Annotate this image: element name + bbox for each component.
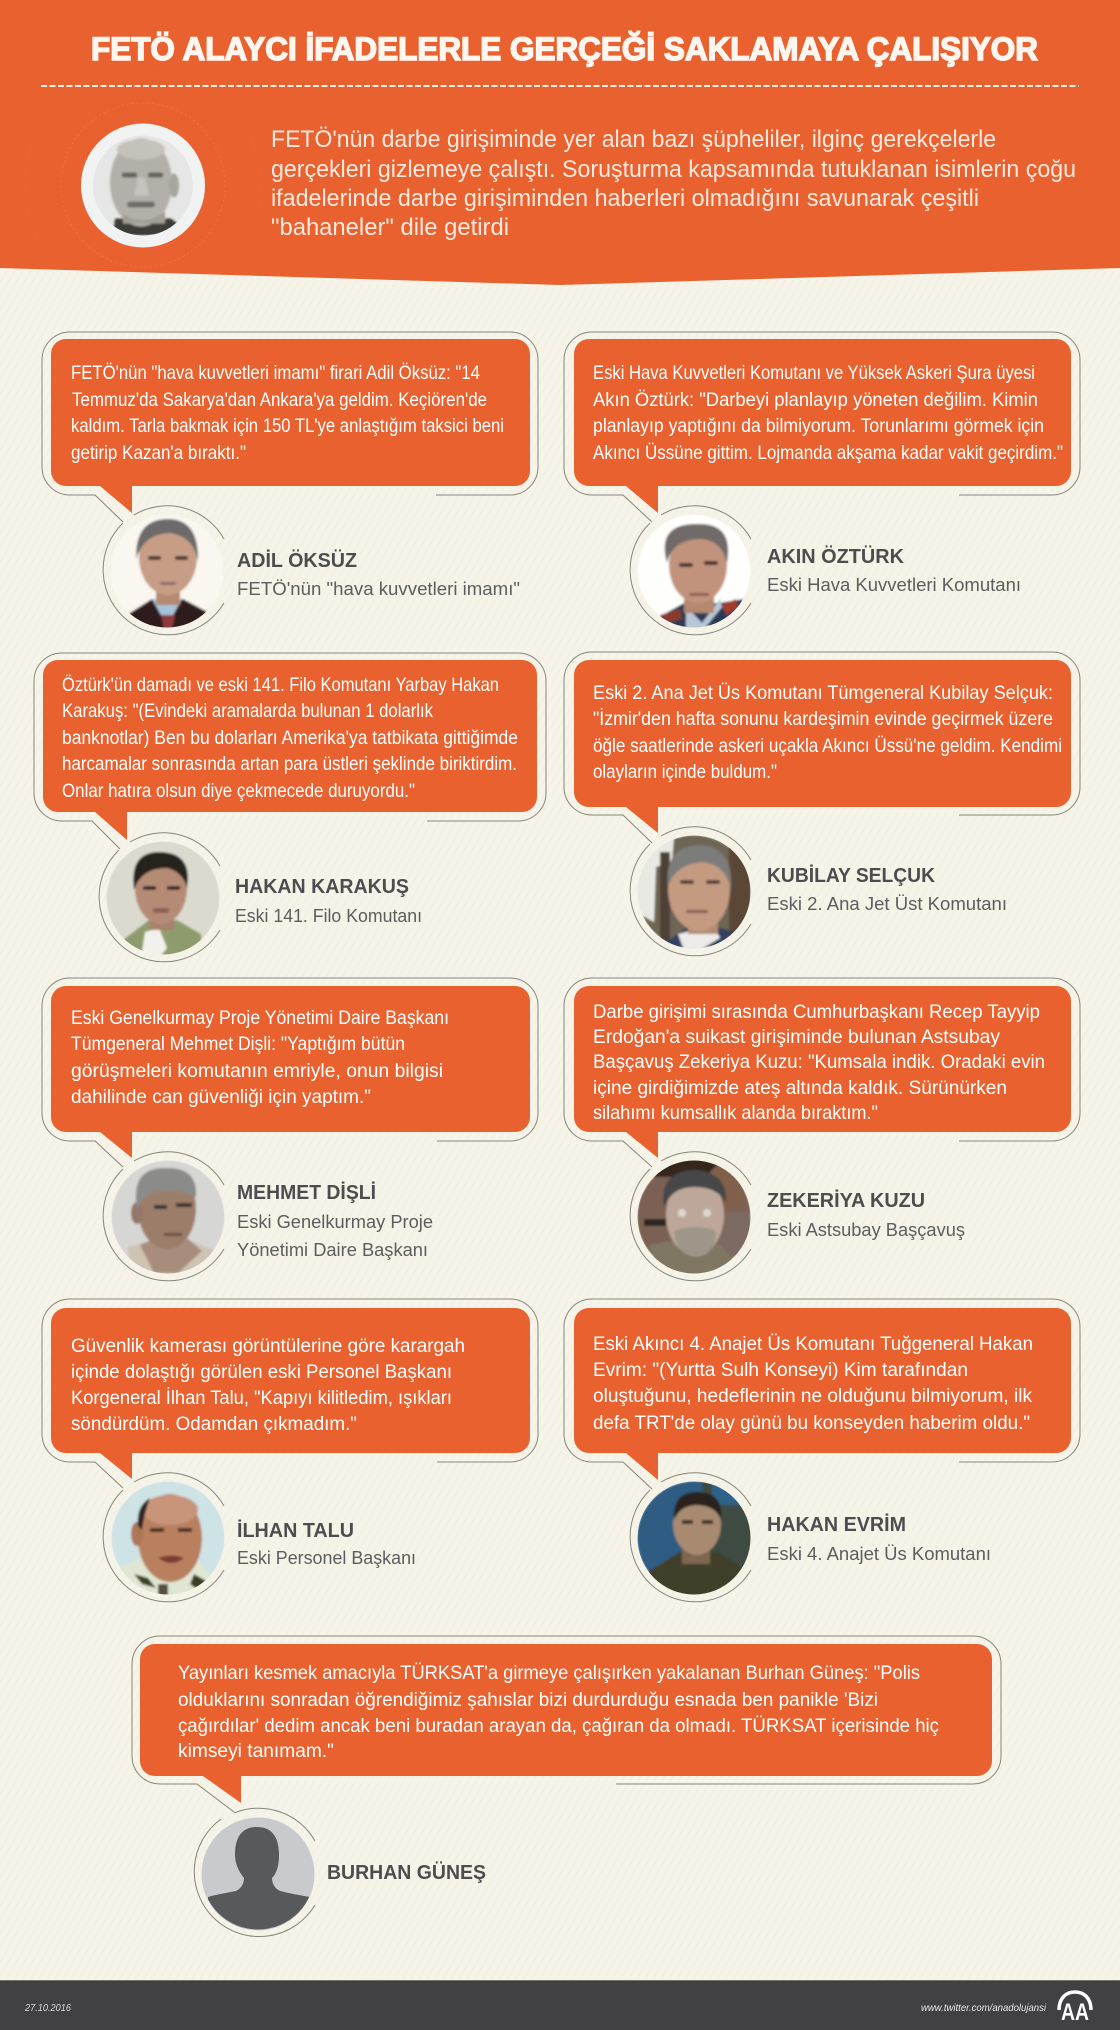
title: FETÖ ALAYCI İFADELERLE GERÇEĞİ SAKLAMAYA ÇALIŞIYOR xyxy=(91,31,1038,67)
label: Zekeriya Kuzu: Eski Astsubay Başçavuş xyxy=(767,1219,965,1240)
panel: Akın Öztürk quote: Akıncı Üssüne gittim. Lojmanda akşama kadar vakit geçirdim." xyxy=(593,442,1063,464)
panel: Zekeriya Kuzu quote: Başçavuş Zekeriya Kuzu: "Kumsala indik. Oradaki evin xyxy=(593,1051,1045,1073)
panel: Kubilay Selçuk quote: öğle saatlerinde askeri uçakla Akıncı Üssü'ne geldim. Kendimi xyxy=(593,735,1062,757)
panel: Zekeriya Kuzu quote: Darbe girişimi sırasında Cumhurbaşkanı Recep Tayyip xyxy=(593,1001,1040,1023)
footer link: www.twitter.com/anadolujansi xyxy=(921,2002,1047,2014)
panel: Zekeriya Kuzu quote: içine girdiğimizde ateş altında kaldık. Sürünürken xyxy=(593,1077,1007,1099)
label: Hakan Evrim xyxy=(767,1513,991,1564)
label: Kubilay Selçuk: Eski 2. Ana Jet Üst Komutanı xyxy=(767,893,1007,914)
panel: İlhan Talu quote: Korgeneral İlhan Talu, "Kapıyı kilitledim, ışıkları xyxy=(71,1386,452,1409)
label: Adil Öksüz: FETÖ'nün "hava kuvvetleri imamı" xyxy=(237,578,520,599)
panel: İlhan Talu quote: içinde dolaştığı görülen eski Personel Başkanı xyxy=(71,1361,452,1383)
panel: Mehmet Dişli quote xyxy=(42,978,538,1167)
panel: Adil Öksüz quote: Temmuz'da Sakarya'dan Ankara'ya geldim. Keçiören'de xyxy=(72,389,487,411)
intro text: ifadelerinde darbe girişiminden haberleri olmadığını savunarak çeşitli xyxy=(271,185,979,212)
label: Zekeriya Kuzu xyxy=(767,1189,965,1240)
label: Hakan Karakuş xyxy=(235,876,422,926)
panel: Burhan Güneş quote: kimseyi tanımam." xyxy=(178,1740,334,1762)
label: Kubilay Selçuk: KUBİLAY SELÇUK xyxy=(767,864,936,887)
panel: Kubilay Selçuk quote: olayların içinde buldum." xyxy=(593,761,777,783)
panel: Mehmet Dişli quote: Tümgeneral Mehmet Dişli: "Yaptığım bütün xyxy=(71,1033,405,1055)
label: Mehmet Dişli xyxy=(237,1181,433,1260)
label: Hakan Karakuş: HAKAN KARAKUŞ xyxy=(235,876,409,898)
panel: Adil Öksüz quote: kaldım. Tarla bakmak için 150 TL'ye anlaştığım taksici beni xyxy=(71,415,504,437)
footer bar xyxy=(0,1980,1120,2030)
label: İlhan Talu xyxy=(237,1519,416,1568)
panel: Burhan Güneş quote: Yayınları kesmek amacıyla TÜRKSAT'a girmeye çalışırken yakalanan Burhan Güneş: "Polis xyxy=(178,1662,920,1684)
label: İlhan Talu: İLHAN TALU xyxy=(237,1519,354,1542)
panel: Hakan Evrim quote: Eski Akıncı 4. Anajet Üs Komutanı Tuğgeneral Hakan xyxy=(593,1333,1033,1355)
label: Zekeriya Kuzu: ZEKERİYA KUZU xyxy=(767,1189,925,1212)
panel: Hakan Karakuş quote: banknotlar) Ben bu dolarları Amerika'ya tatbikata gittiğimde xyxy=(62,727,518,749)
label: Kubilay Selçuk xyxy=(767,864,1007,914)
header band xyxy=(0,0,1120,303)
panel: İlhan Talu quote: Güvenlik kamerası görüntülerine göre karargah xyxy=(71,1335,465,1357)
portrait: Mehmet Dişli xyxy=(103,1152,225,1281)
panel: Hakan Karakuş quote: Öztürk'ün damadı ve eski 141. Filo Komutanı Yarbay Hakan xyxy=(62,674,499,696)
label: Adil Öksüz: ADİL ÖKSÜZ xyxy=(237,549,357,572)
intro text: FETÖ'nün darbe girişiminde yer alan bazı şüpheliler, ilginç gerekçelerle xyxy=(271,126,996,153)
icon: Anadolu Agency logo: AA xyxy=(1061,1999,1089,2026)
panel: Akın Öztürk quote: Akın Öztürk: "Darbeyi planlayıp yöneten değilim. Kimin xyxy=(593,389,1038,411)
label: Adil Öksüz xyxy=(237,549,520,599)
panel: Hakan Evrim quote: Evrim: "(Yurtta Sulh Konseyi) Kim tarafından xyxy=(593,1359,968,1381)
panel: Zekeriya Kuzu quote: silahımı kumsallık alanda bıraktım." xyxy=(593,1102,878,1124)
panel: Burhan Güneş quote: çağırdılar' dedim ancak beni buradan arayan da, çağıran da olmadı. TÜRKSAT içerisinde hiç xyxy=(178,1715,939,1737)
panel: Hakan Evrim quote xyxy=(564,1299,1080,1489)
label: Hakan Evrim: Eski 4. Anajet Üs Komutanı xyxy=(767,1543,991,1564)
panel: Burhan Güneş quote: olduklarını sonradan öğrendiğimiz şahıslar bizi durdurduğu esnada ben panikle 'Bizi xyxy=(178,1689,878,1711)
intro text: "bahaneler" dile getirdi xyxy=(271,214,509,241)
panel: Kubilay Selçuk quote xyxy=(564,652,1080,843)
panel: İlhan Talu quote xyxy=(42,1299,538,1488)
panel: Hakan Evrim quote: defa TRT'de olay günü bu konseyden haberim oldu." xyxy=(593,1412,1030,1434)
panel: Hakan Karakuş quote: Karakuş: "(Evindeki aramalarda bulunan 1 dolarlık xyxy=(62,700,433,722)
portrait: Kubilay Selçuk xyxy=(630,827,751,956)
portrait: İlhan Talu xyxy=(103,1473,225,1602)
panel: Hakan Karakuş quote: harcamalar sonrasında artan para üstleri şeklinde biriktirdim. xyxy=(62,753,517,775)
intro text xyxy=(271,126,1076,241)
label: Akın Öztürk: AKIN ÖZTÜRK xyxy=(767,545,905,568)
portrait: Adil Öksüz xyxy=(103,506,224,635)
panel: Kubilay Selçuk quote: Eski 2. Ana Jet Üs Komutanı Tümgeneral Kubilay Selçuk: xyxy=(593,682,1053,704)
panel: Akın Öztürk quote: planlayıp yaptığını da bilmiyorum. Torunlarımı görmek için xyxy=(593,415,1044,437)
label: İlhan Talu: Eski Personel Başkanı xyxy=(237,1547,416,1568)
portrait: Zekeriya Kuzu xyxy=(630,1152,751,1281)
panel: Hakan Karakuş quote: Onlar hatıra olsun diye çekmecede duruyordu." xyxy=(62,780,415,802)
icon: Anadolu Agency logo xyxy=(1059,1992,1091,2026)
icon: header portrait xyxy=(81,124,205,248)
panel: Mehmet Dişli quote: görüşmeleri komutanın emriyle, onun bilgisi xyxy=(71,1060,443,1082)
panel: Mehmet Dişli quote: Eski Genelkurmay Proje Yönetimi Daire Başkanı xyxy=(71,1007,449,1029)
panel: Hakan Karakuş quote xyxy=(34,653,546,849)
label: Mehmet Dişli: MEHMET DİŞLİ xyxy=(237,1181,376,1204)
panel: Adil Öksüz quote: getirip Kazan'a bıraktı." xyxy=(71,442,246,464)
label: Hakan Karakuş: Eski 141. Filo Komutanı xyxy=(235,905,422,926)
portrait: Hakan Evrim xyxy=(630,1473,752,1602)
portrait: Hakan Karakuş xyxy=(99,833,220,962)
panel: İlhan Talu quote: söndürdüm. Odamdan çıkmadım." xyxy=(71,1413,357,1435)
portrait: Akın Öztürk xyxy=(630,506,751,635)
panel: Adil Öksüz quote: FETÖ'nün "hava kuvvetleri imamı" firari Adil Öksüz: "14 xyxy=(71,362,480,384)
panel: Kubilay Selçuk quote: "İzmir'den hafta sonunu kardeşimin evinde geçirmek üzere xyxy=(593,707,1053,730)
panel: Zekeriya Kuzu quote: Erdoğan'a suikast girişiminde bulunan Astsubay xyxy=(593,1026,1000,1048)
label: Hakan Evrim: HAKAN EVRİM xyxy=(767,1513,906,1536)
label: Mehmet Dişli: Yönetimi Daire Başkanı xyxy=(237,1239,428,1260)
panel: Akın Öztürk quote: Eski Hava Kuvvetleri Komutanı ve Yüksek Askeri Şura üyesi xyxy=(593,362,1035,384)
panel: Mehmet Dişli quote: dahilinde can güvenliği için yaptım." xyxy=(71,1086,371,1108)
panel: Hakan Evrim quote: oluştuğunu, hedeflerinin ne olduğunu bilmiyorum, ilk xyxy=(593,1385,1032,1407)
panel: Burhan Güneş quote xyxy=(132,1636,1001,1812)
panel: Adil Öksüz quote xyxy=(42,332,538,522)
label: Burhan Güneş: BURHAN GÜNEŞ xyxy=(327,1861,486,1884)
footer date: 27.10.2016 xyxy=(24,2002,71,2014)
label: Mehmet Dişli: Eski Genelkurmay Proje xyxy=(237,1211,433,1232)
portrait: Burhan Güneş silhouette xyxy=(194,1808,315,1937)
label: Akın Öztürk: Eski Hava Kuvvetleri Komutanı xyxy=(767,574,1021,595)
panel: Akın Öztürk quote xyxy=(564,332,1080,522)
intro text: gerçekleri gizlemeye çalıştı. Soruşturma kapsamında tutuklanan isimlerin çoğu xyxy=(271,156,1076,183)
panel: Zekeriya Kuzu quote xyxy=(564,978,1080,1167)
label: Akın Öztürk xyxy=(767,545,1021,595)
